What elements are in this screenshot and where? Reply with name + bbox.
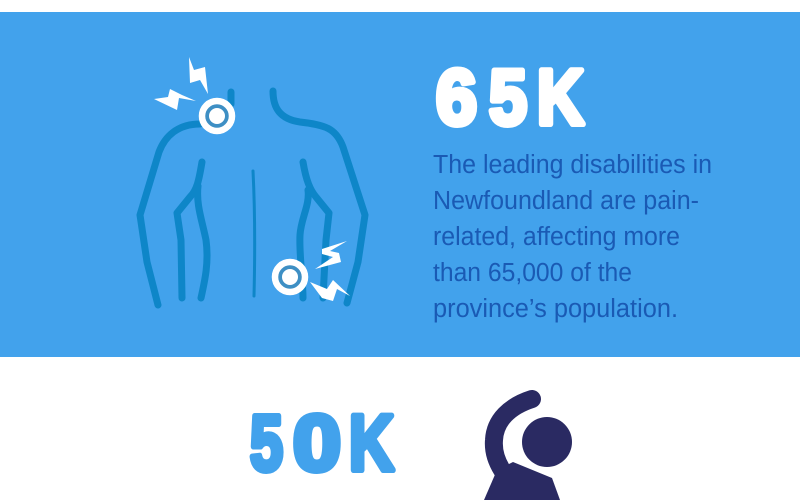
text block: disability description — [433, 151, 712, 323]
stat: 65K: 5 — [489, 53, 527, 141]
pain point: neck — [202, 101, 232, 131]
body outline — [140, 91, 365, 305]
panel: 65K blue band — [0, 12, 800, 357]
stat: 50K: K — [349, 398, 394, 487]
text block: disability description: province’s population. — [433, 295, 678, 323]
stat: 65K: K — [537, 53, 584, 141]
stat: 50K: 0 — [293, 398, 341, 487]
spine — [253, 171, 255, 296]
pain point: lower back — [275, 262, 305, 292]
lightning bolts — [154, 57, 350, 301]
icon: stretching person — [484, 399, 572, 500]
text block: disability description: related, affecting more — [433, 223, 680, 251]
stat: 65K: 6 — [436, 53, 477, 141]
text block: disability description: The leading disabilities in — [433, 151, 712, 179]
stat: 50K: 5 — [250, 398, 283, 487]
text block: disability description: than 65,000 of the — [433, 259, 632, 287]
icon: back with pain points — [140, 57, 365, 305]
text block: disability description: Newfoundland are pain- — [433, 187, 699, 215]
